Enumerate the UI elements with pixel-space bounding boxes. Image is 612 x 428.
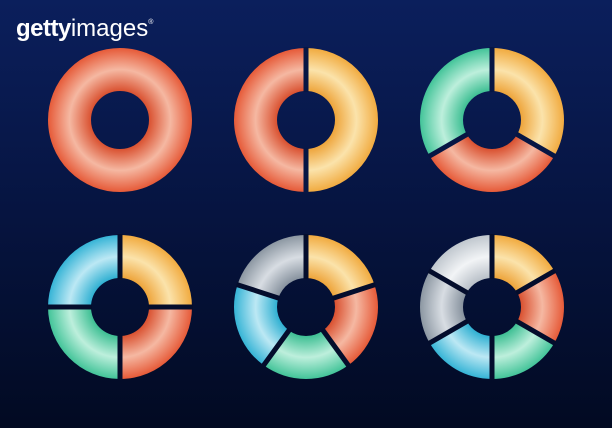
watermark: gettyimages logo: ® (148, 18, 154, 26)
donut 1: single orange ring (70, 70, 170, 170)
donut 3: three segments (420, 47, 564, 192)
donut 5: five segments (234, 234, 378, 379)
donut 4: four segments (47, 234, 193, 380)
donut 2: two segments (234, 47, 378, 193)
watermark: gettyimages logo: gettyimages (16, 15, 148, 42)
donut 6: six segments (420, 234, 564, 380)
